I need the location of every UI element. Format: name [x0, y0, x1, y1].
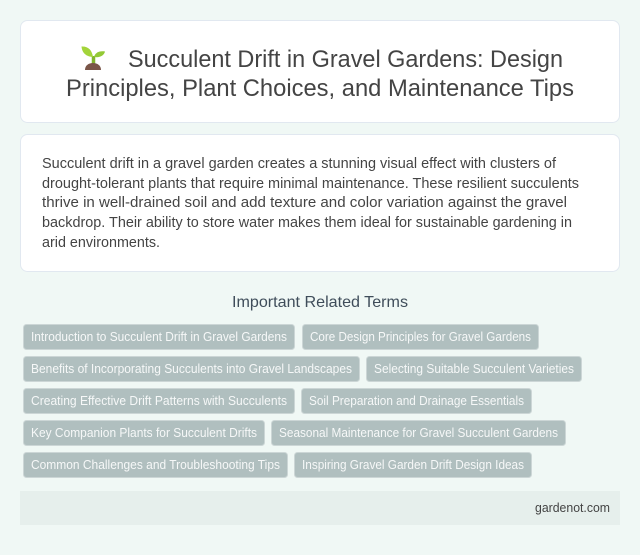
chip	[294, 452, 532, 478]
chip	[24, 420, 264, 446]
description text: arid environments.	[42, 235, 160, 251]
description panel	[20, 134, 620, 272]
heading: important related terms: Important Related Terms	[232, 294, 408, 311]
chip: Benefits of Incorporating Succulents into Gravel Landscapes	[31, 362, 352, 376]
chip	[24, 356, 360, 382]
icon: seedling	[82, 46, 105, 70]
title text: Succulent Drift in Gravel Gardens: Design	[128, 46, 563, 73]
chip: Common Challenges and Troubleshooting Tips	[31, 458, 280, 472]
chip	[24, 324, 294, 350]
title text: Principles, Plant Choices, and Maintenance Tips	[66, 75, 574, 102]
chip: Seasonal Maintenance for Gravel Succulent Gardens	[279, 426, 558, 440]
chip: Selecting Suitable Succulent Varieties	[374, 362, 574, 376]
chip	[272, 420, 566, 446]
chip	[302, 324, 538, 350]
description text: drought-tolerant plants that require minimal maintenance. These resilient succulents	[42, 176, 579, 192]
footer bar	[20, 491, 620, 525]
chip	[24, 388, 294, 414]
chip: Core Design Principles for Gravel Gardens	[310, 330, 531, 344]
chip: Introduction to Succulent Drift in Gravel Gardens	[31, 330, 287, 344]
title panel	[20, 20, 620, 122]
description text: Succulent drift in a gravel garden creates a stunning visual effect with clusters of	[42, 156, 557, 172]
chip	[366, 356, 582, 382]
chip: Inspiring Gravel Garden Drift Design Ideas	[302, 458, 524, 472]
description text	[42, 156, 579, 251]
chip: Key Companion Plants for Succulent Drifts	[31, 426, 257, 440]
description text: thrive in well-drained soil and add texture and color variation against the gravel	[42, 195, 567, 211]
title text	[66, 46, 574, 102]
chip	[24, 452, 288, 478]
description text: backdrop. Their ability to store water makes them ideal for sustainable gardening in	[42, 215, 572, 231]
chip: Soil Preparation and Drainage Essentials	[309, 394, 524, 408]
footer text: gardenot.com	[535, 500, 610, 515]
related terms chips	[24, 324, 582, 478]
chip	[302, 388, 532, 414]
chip: Creating Effective Drift Patterns with Succulents	[31, 394, 287, 408]
